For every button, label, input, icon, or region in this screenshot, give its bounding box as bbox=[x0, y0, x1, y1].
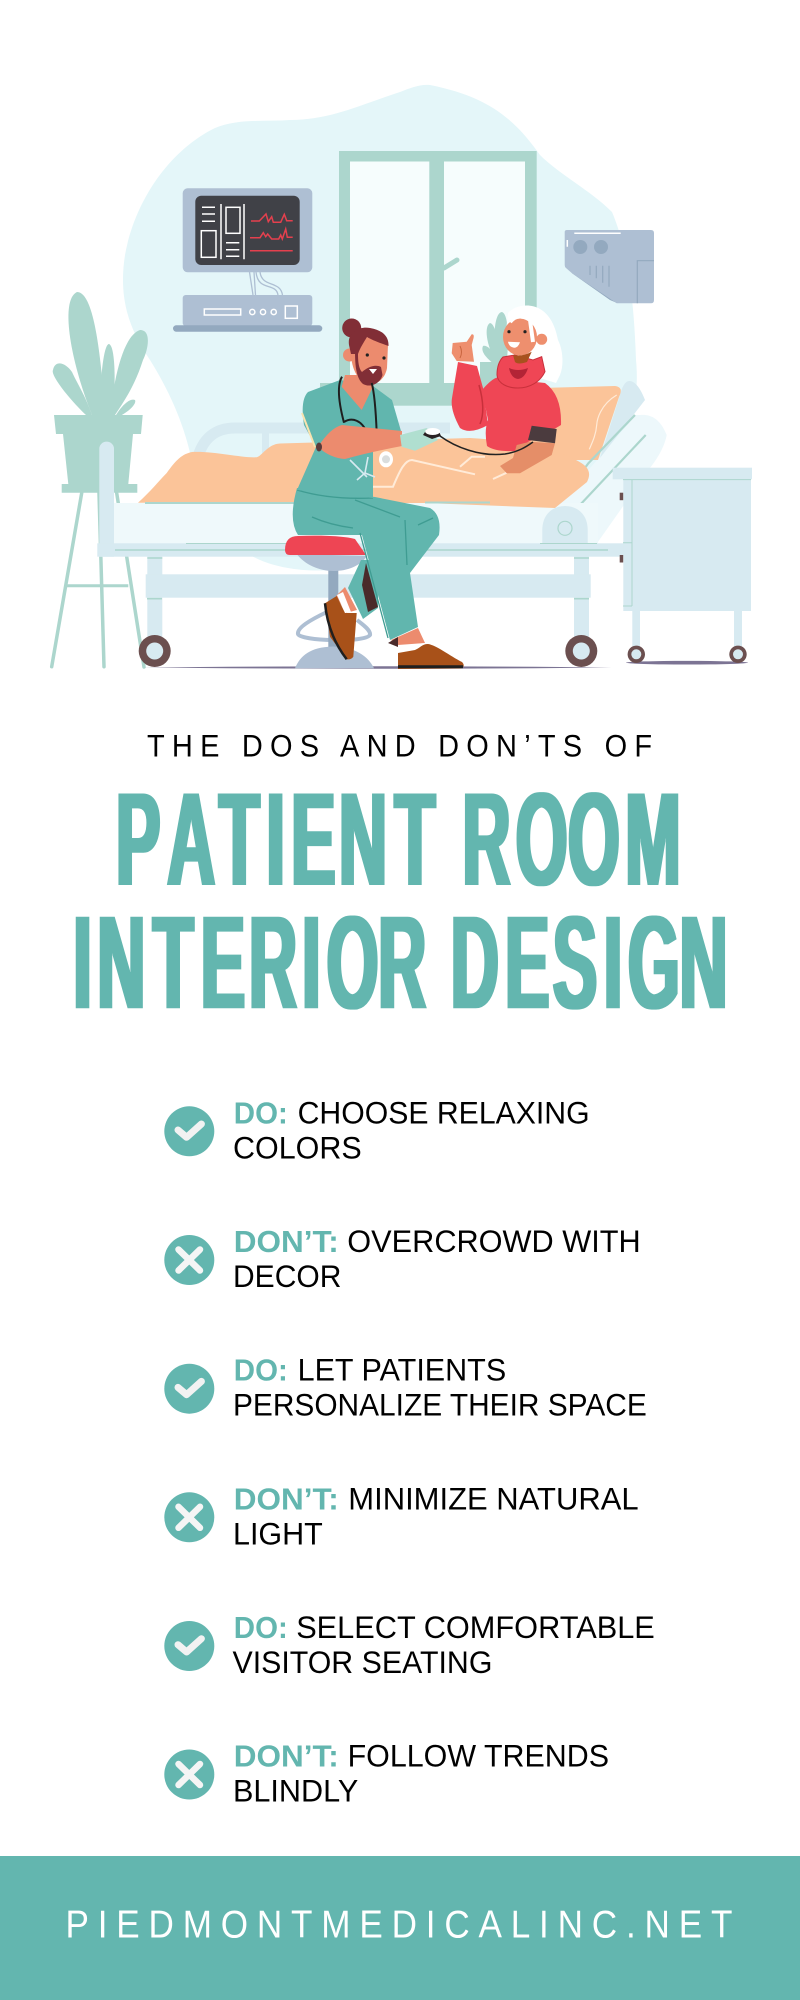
list item: minimize natural light: DON’T: bbox=[234, 1481, 339, 1516]
icon: check bbox=[164, 1106, 214, 1156]
patient torso bbox=[482, 378, 561, 451]
list item: choose relaxing colors bbox=[164, 1094, 590, 1165]
patient hair bbox=[505, 306, 562, 383]
stethoscope bbox=[339, 377, 377, 433]
list item: select comfortable seating: VISITOR SEATING bbox=[232, 1644, 492, 1680]
footer band bbox=[0, 1856, 800, 2000]
list item: overcrowd with decor: DECOR bbox=[233, 1258, 341, 1294]
bed frame rail bbox=[97, 543, 630, 557]
list item: follow trends blindly bbox=[164, 1738, 609, 1808]
icon: cross bbox=[164, 1750, 214, 1800]
doctor head bbox=[342, 318, 389, 386]
doctor left ankle and shoe bbox=[336, 587, 357, 613]
list item: select comfortable seating: SELECT COMFORTABLE bbox=[296, 1609, 655, 1645]
list item: let patients personalize: LET PATIENTS bbox=[298, 1352, 506, 1388]
wall monitor bbox=[173, 188, 322, 332]
title bbox=[73, 766, 728, 1037]
backrest panel bbox=[540, 415, 667, 543]
bed rear rail bbox=[197, 428, 450, 460]
doctor torso bbox=[297, 380, 401, 498]
bed legs and crossbar bbox=[147, 556, 162, 637]
list item: overcrowd with decor bbox=[164, 1223, 641, 1294]
backrest rails bbox=[557, 415, 646, 507]
icon: cross bbox=[164, 1492, 214, 1542]
knee joint bbox=[542, 506, 588, 543]
illustration: hospital room scene bbox=[52, 85, 752, 669]
potted plant on stand bbox=[52, 292, 148, 667]
list item: choose relaxing colors: CHOOSE RELAXING bbox=[298, 1094, 590, 1130]
doctor trousers bbox=[293, 488, 440, 640]
list item: minimize natural light: LIGHT bbox=[233, 1515, 323, 1551]
patient face bbox=[503, 318, 537, 356]
stethoscope chest piece bbox=[379, 451, 393, 467]
bedside cabinet bbox=[613, 468, 752, 664]
list item: choose relaxing colors: COLORS bbox=[233, 1129, 362, 1165]
patient arm sleeve bbox=[452, 362, 488, 431]
pulse oximeter bbox=[423, 429, 441, 439]
blanket creases bbox=[373, 457, 507, 487]
icon: window plant bbox=[480, 312, 508, 383]
headboard bbox=[600, 381, 645, 458]
icon: check bbox=[164, 1621, 214, 1671]
list item: overcrowd with decor: OVERCROWD WITH bbox=[347, 1223, 641, 1259]
doctor rear leg bbox=[348, 560, 378, 619]
list item: select comfortable seating bbox=[164, 1609, 655, 1680]
list item: let patients personalize: PERSONALIZE THEIR SPACE bbox=[233, 1387, 647, 1423]
list item: follow trends blindly: FOLLOW TRENDS bbox=[348, 1738, 609, 1774]
blood pressure cuff bbox=[528, 426, 557, 443]
website address: PIEDMONTMEDICALINC.NET bbox=[66, 1902, 732, 1946]
doctor bbox=[293, 318, 533, 669]
list item: minimize natural light: MINIMIZE NATURAL bbox=[348, 1480, 639, 1516]
background blob bbox=[123, 85, 637, 571]
patient scarf bbox=[497, 355, 545, 388]
icon: cross bbox=[164, 1235, 214, 1285]
patient forearm bbox=[500, 442, 555, 473]
list item: select comfortable seating: DO: bbox=[234, 1610, 288, 1645]
blanket bbox=[138, 438, 589, 508]
title: INTERIOR DESIGN bbox=[73, 889, 728, 1037]
cuff cable bbox=[440, 436, 533, 455]
icon: check bbox=[164, 1364, 214, 1414]
bed post bbox=[99, 442, 114, 557]
list item: let patients personalize bbox=[164, 1352, 647, 1423]
list item: choose relaxing colors: DO: bbox=[234, 1095, 288, 1130]
patient bbox=[452, 306, 562, 473]
doctor forearm bbox=[318, 425, 402, 459]
list item: minimize natural light bbox=[164, 1480, 639, 1551]
hospital bed bbox=[97, 381, 667, 669]
list item: follow trends blindly: DON’T: bbox=[234, 1738, 339, 1774]
wall air unit bbox=[565, 230, 654, 303]
stool bbox=[285, 536, 374, 668]
doctor right ankle and shoe bbox=[391, 628, 425, 646]
patient raised hand bbox=[452, 334, 474, 362]
list item: let patients personalize: DO: bbox=[234, 1353, 288, 1388]
pillow bbox=[520, 386, 621, 460]
list item: overcrowd with decor: DON’T: bbox=[234, 1224, 339, 1259]
title: PATIENT ROOM bbox=[116, 766, 681, 914]
list item: follow trends blindly: BLINDLY bbox=[233, 1772, 358, 1808]
floor shadow bbox=[143, 666, 612, 669]
subtitle: THE DOS AND DON’TS OF bbox=[147, 730, 652, 764]
window bbox=[320, 151, 537, 406]
bed wheels bbox=[139, 635, 597, 667]
doctor glove bbox=[400, 428, 438, 451]
mattress bbox=[114, 503, 598, 544]
